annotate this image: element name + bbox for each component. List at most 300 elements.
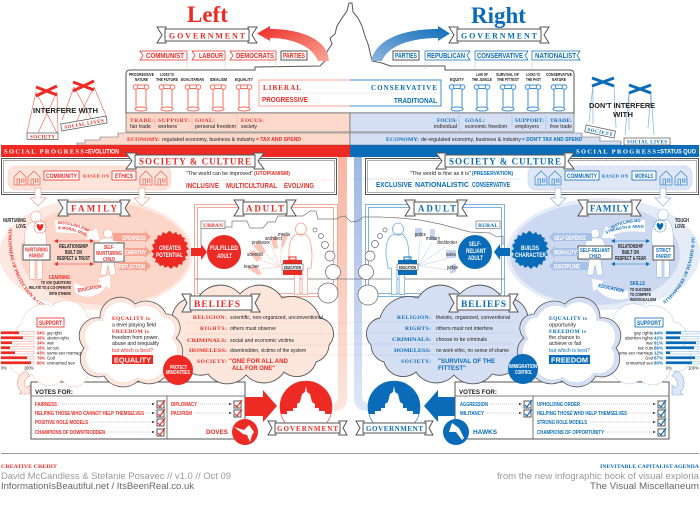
panel: left policy row: FOCUS: xyxy=(241,118,264,124)
columns: left values: LOOKS TO xyxy=(160,72,174,77)
panel: right beliefs cloud: SOCIETY: xyxy=(401,359,431,365)
arrow and circle: self-reliant adult: SELF- xyxy=(469,242,481,248)
columns: right values: LAW OF xyxy=(476,72,488,77)
chart: left support: 34% xyxy=(37,340,46,346)
chart: right support: 80% xyxy=(654,360,664,366)
votes: left panel: PACIFISM xyxy=(171,411,192,417)
panel: right equality cloud: but which is best? xyxy=(549,348,590,354)
skyline and horizon xyxy=(195,211,505,279)
interfere with: scaffolds left: SOCIAL LIVES xyxy=(64,119,105,131)
panel: left economy xyxy=(77,133,350,145)
nurturing parent: NURTURING xyxy=(3,218,26,224)
panel: left beliefs cloud: CRIMINALS: xyxy=(187,338,227,344)
arrow and circle: fulfilled adult: FULFILLED xyxy=(210,245,238,252)
arrow and circle: self-reliant adult xyxy=(458,235,510,269)
votes: left panel: CHAMPIONS OF DOWNTRODDEN xyxy=(35,430,105,436)
votes: right panel: CHAMPIONS OF OPPORTUNITY xyxy=(537,430,604,436)
education arrow left xyxy=(74,275,110,297)
panel: left beliefs cloud: HOMELESS: xyxy=(189,348,227,354)
credit: left xyxy=(1,464,231,491)
chart: right support: 87% xyxy=(654,356,664,362)
votes: right panel: AGGRESSION xyxy=(460,402,488,408)
jobs left: scientist xyxy=(247,252,264,258)
panel: left economy: = TAX AND SPEND xyxy=(256,137,301,143)
strict parent: LOVE xyxy=(675,224,685,230)
social progress: left bar: =EVOLUTION xyxy=(85,148,119,156)
relationship left: RESPECT & TRUST xyxy=(57,256,90,262)
parties: left: COMMUNIST xyxy=(146,53,185,60)
panel: left society and culture: (UTOPIANISM) xyxy=(254,171,290,177)
arrow and circle: fulfilled adult xyxy=(191,235,241,269)
panel: right equality cloud: opportunity xyxy=(549,322,577,328)
panel: right economy: = DON'T TAX AND SPEND xyxy=(522,137,582,143)
votes: right panel xyxy=(455,382,669,439)
relationship left xyxy=(54,239,94,266)
chart: left support: 100% xyxy=(24,366,35,372)
relationship right: BUILT ON xyxy=(622,250,639,256)
chart: left support: abortion rights xyxy=(47,336,69,342)
chart: right support: gay rights xyxy=(634,330,654,336)
panel: left beliefs cloud: SOCIETY: xyxy=(197,359,227,365)
strict parent: TOUGH xyxy=(675,218,689,224)
chart: left support: 66% xyxy=(37,336,46,342)
panel: right beliefs cloud: RELIGION: xyxy=(397,315,431,321)
panel: right beliefs cloud: choose to be criminals xyxy=(436,337,488,343)
relationship right xyxy=(611,239,650,266)
ribbon: society and culture left xyxy=(126,153,264,169)
starburst: creates potential: CREATES xyxy=(159,246,181,252)
votes: right panel: VOTES FOR: xyxy=(459,389,497,396)
chart: right support: 12% xyxy=(654,350,664,356)
ribbon: family right xyxy=(578,200,641,216)
community row right: MORALS xyxy=(635,173,653,180)
instilling arrow right xyxy=(602,219,645,238)
education arrow right xyxy=(592,279,628,300)
ribbon: left government xyxy=(157,27,257,43)
ribbon: society and culture right: SOCIETY & CULTURE xyxy=(449,156,561,166)
votes: left panel: POSITIVE ROLE MODELS xyxy=(35,420,88,426)
social progress: right bar xyxy=(350,145,699,157)
arrow and circle: self-reliant adult: ADULT xyxy=(468,256,483,262)
interfere with: scaffolds left: SOCIETY xyxy=(30,136,55,140)
ribbon: left government bottom: GOVERNMENT xyxy=(277,425,338,433)
panel: right equality cloud: FREEDOM is xyxy=(549,329,586,335)
ribbon: family left: FAMILY xyxy=(71,204,118,214)
arrows: community to family right xyxy=(550,188,671,206)
votes: right panel: HAWKS xyxy=(473,429,498,436)
jobs left xyxy=(244,232,290,275)
community row left xyxy=(8,166,171,190)
circle: protect minorities: MINORITIES xyxy=(166,370,191,376)
panel: right beliefs cloud: others must not interfere xyxy=(436,326,493,332)
columns: right values: SURVIVAL OF xyxy=(496,72,519,77)
strict parent: STRICT xyxy=(656,248,671,254)
panel: left equality cloud: EQUALITY is xyxy=(112,316,150,322)
ribbon: beliefs right xyxy=(449,294,518,312)
panel: left economy: regulated economy, business & industry xyxy=(162,137,256,143)
credit: left: David McCandless & Stefanie Posavec // v1.0 // Oct 09 xyxy=(1,471,231,481)
panel: right equality cloud xyxy=(517,297,621,387)
arrow: votes to right government xyxy=(424,390,455,422)
social progress: left bar: SOCIAL PROGRESS xyxy=(4,148,84,156)
central stripes xyxy=(334,157,368,411)
jobs right: military xyxy=(426,236,440,242)
instilling arrow right: STRENGTH & ABSOLUTES xyxy=(605,225,644,234)
chart: left support: 90% xyxy=(37,360,46,366)
columns: left values xyxy=(129,72,253,111)
votes: right panel: STRONG ROLE MODELS xyxy=(537,420,587,426)
ribbon: adult right: ADULT xyxy=(418,204,456,214)
credit: right xyxy=(497,464,699,491)
ribbon: beliefs left xyxy=(182,294,260,312)
jobs left: professor xyxy=(252,240,270,246)
ribbon: adult left xyxy=(234,200,296,216)
chart: right support: 0% xyxy=(666,366,673,372)
chart: right support: same-sex marriage xyxy=(617,350,653,356)
arrows: community to family left xyxy=(30,188,150,206)
figure: left adult with education case: EDUCATION xyxy=(284,265,301,270)
chart: right support: abortion rights xyxy=(625,336,654,342)
panel: left equality cloud: freedom from power, xyxy=(112,335,159,341)
capitol outline and temple base xyxy=(126,3,574,113)
chart: right support: war xyxy=(646,340,653,346)
chart: left support: SUPPORT xyxy=(39,320,62,327)
panel: right adult xyxy=(366,204,504,296)
panel: right beliefs cloud: "SURVIVAL OF THE xyxy=(438,359,495,365)
votes: left panel xyxy=(31,382,245,439)
panel: right society and culture xyxy=(350,158,698,194)
chart: right support: 91% xyxy=(654,340,664,346)
ribbon: right government bottom: GOVERNMENT xyxy=(366,425,423,433)
panel: left beliefs cloud: downtrodden, victims of the system xyxy=(230,348,306,354)
panel: left beliefs cloud xyxy=(166,285,350,384)
panel: left policy row: personal freedom xyxy=(195,124,236,130)
social progress: left bar xyxy=(1,145,350,157)
columns: left values: EQUALITY xyxy=(235,77,253,82)
parties: left: LABOUR xyxy=(199,53,223,60)
chart: left support: 26% xyxy=(37,346,46,352)
relationship left: RELATIONSHIP xyxy=(59,244,88,250)
interfere with: scaffolds right: DON'T INTERFERE xyxy=(589,101,655,110)
arrow: capitol to right government xyxy=(371,26,450,61)
chart: right support: 44% xyxy=(654,330,664,336)
columns: left values: PROGRESSIVE xyxy=(129,72,154,77)
outcome arrows right: DISCIPLINE xyxy=(554,264,580,270)
social progress: right bar: SOCIAL PROGRESS xyxy=(576,148,656,156)
votes: left panel: FAIRNESS xyxy=(35,402,57,408)
skills text: INDIVIDUALISM xyxy=(630,297,656,303)
learning text xyxy=(29,275,72,297)
panel: left equality cloud: EQUALITY xyxy=(114,358,151,364)
footer divider xyxy=(1,452,699,454)
jobs right: sales xyxy=(446,252,456,258)
circle: immigration control: IMMIGRATION xyxy=(509,364,537,370)
panel: right policy row xyxy=(350,113,574,132)
panel: right beliefs cloud: no work ethic, no sense of shame xyxy=(436,348,509,354)
icon: hawk xyxy=(443,419,469,445)
panel: liberal vs conservative labels: PROGRESSIVE xyxy=(262,97,308,104)
community row right: COMMUNITY xyxy=(567,173,597,180)
panel: left society and culture: INCLUSIVE xyxy=(186,183,219,190)
label: urban: URBAN xyxy=(203,223,223,229)
panel: left beliefs cloud: social and economic victims xyxy=(230,338,295,344)
panel: right beliefs cloud: FITTEST" xyxy=(438,366,466,372)
nurturing parent xyxy=(3,211,50,279)
ribbon: left government bottom xyxy=(268,421,347,435)
learning text: WITH OTHERS xyxy=(49,291,72,297)
columns: right values xyxy=(449,72,572,111)
parties: right: PARTIES xyxy=(395,53,417,60)
jobs right xyxy=(415,228,458,274)
skills text: TO COMPETE xyxy=(630,292,652,298)
columns: right values: THE JUNGLE xyxy=(472,77,492,82)
panel: right equality cloud: achieve or fail xyxy=(549,341,581,347)
outcome arrows right: SELF-DEFENCE xyxy=(554,236,586,242)
panel: right equality cloud: the chance to xyxy=(549,335,580,341)
chart: left support: God xyxy=(47,356,55,362)
outcome arrows left xyxy=(113,231,151,272)
ribbon: beliefs right: BELIEFS xyxy=(461,300,506,310)
panel: left adult xyxy=(194,204,338,296)
columns: left values: EGALITARIAN xyxy=(181,77,204,82)
interfere with: scaffolds right: SOCIETY xyxy=(587,128,613,138)
ribbon: family left xyxy=(58,200,130,216)
panel: right society and culture: NATIONALISTIC xyxy=(415,182,469,189)
panel: liberal vs conservative labels xyxy=(259,80,441,106)
panel: left policy row: SUPPORT: xyxy=(158,118,190,124)
label: urban xyxy=(201,221,225,229)
chart: right support: 100% xyxy=(688,366,700,372)
panel: left equality cloud: abuse and inequality xyxy=(112,341,160,347)
learning text: TO ASK QUESTIONS xyxy=(41,280,71,286)
chart: left support xyxy=(1,301,106,394)
ribbon: beliefs left: BELIEFS xyxy=(194,300,240,310)
relationship left: BUILT ON xyxy=(65,250,82,256)
interfere with: scaffolds right: SOCIAL LIVES xyxy=(627,140,667,146)
learning text: RELATE TO & CO-OPERATE xyxy=(29,285,72,291)
chart: right support xyxy=(600,304,700,395)
interfere with: scaffolds right: WITH xyxy=(613,110,633,119)
ribbon: society and culture right xyxy=(436,153,574,169)
panel: right economy xyxy=(350,133,621,145)
icon: left capitol dome xyxy=(279,381,333,434)
credit: right: from the new infographic book of visual exploria xyxy=(497,471,699,481)
education arrow right: EDUCATION xyxy=(598,283,625,294)
interfere with: scaffolds left xyxy=(27,81,107,140)
panel: left family xyxy=(0,188,193,310)
skills text: SKILLS xyxy=(630,281,645,287)
thought bubbles left xyxy=(313,228,340,303)
nurturing parent: PARENT xyxy=(29,254,44,260)
child right xyxy=(578,229,612,275)
parties: right: CONSERVATIVE xyxy=(477,53,523,60)
ribbon: right government xyxy=(449,27,549,43)
circle: immigration control xyxy=(508,354,538,384)
panel: left policy row: TRADE: xyxy=(130,118,154,124)
panel: left society and culture: "The world can be improved" xyxy=(186,171,253,177)
starburst: creates potential xyxy=(151,231,189,269)
chart: right support: SUPPORT xyxy=(637,320,661,327)
child right: CHILD xyxy=(589,254,601,260)
panel: left society and culture xyxy=(2,158,336,194)
interfere with: scaffolds right xyxy=(585,78,670,146)
panel: liberal vs conservative labels: LIBERAL xyxy=(263,84,301,92)
parties: left: PARTIES xyxy=(283,53,305,60)
child left: CHILD xyxy=(103,257,115,263)
columns: left values: NATURE xyxy=(135,77,148,82)
panel: liberal vs conservative labels: CONSERVATIVE xyxy=(371,84,437,92)
panel: right society and culture: EXCLUSIVE xyxy=(376,182,412,189)
community row left: BASED ON xyxy=(83,174,110,178)
starburst: builds character xyxy=(511,231,549,269)
columns: right values: CONSERVATIVE xyxy=(546,72,572,77)
chart: left support: tax cuts xyxy=(47,346,59,352)
columns: right values: EQUITY xyxy=(450,77,464,82)
panel: left beliefs cloud: "ONE FOR ALL AND xyxy=(229,359,289,365)
learning text: LEARNING xyxy=(49,275,70,281)
panel: right equality cloud: FREEDOM xyxy=(551,358,588,364)
nurturing parent: LOVE xyxy=(16,224,26,230)
relationship right: RELATIONSHIP xyxy=(618,244,643,250)
child left: NURTURING xyxy=(96,251,122,257)
ribbon: adult right xyxy=(405,200,467,216)
panel: left society and culture: EVOLVING xyxy=(284,183,314,190)
parties: right: NATIONALIST xyxy=(535,53,577,60)
panel: right beliefs cloud: HOMELESS: xyxy=(394,348,431,354)
chart: left support: 0% xyxy=(1,366,8,372)
icon: dove xyxy=(232,419,258,445)
panel: right economy: ECONOMY: xyxy=(386,137,419,143)
ribbon: adult left: ADULT xyxy=(246,204,284,214)
nurturing parent: NURTURING xyxy=(25,248,48,254)
parties: left: DEMOCRATS xyxy=(236,53,274,60)
panel: right beliefs cloud: RIGHTS: xyxy=(405,326,431,332)
relationship right: RESPECT & FEAR xyxy=(615,256,646,262)
panel: liberal vs conservative labels: TRADITIONAL xyxy=(394,98,438,105)
strict parent xyxy=(651,209,689,277)
outcome arrows left: OPENNESS xyxy=(122,235,146,242)
columns: right values: THE PAST xyxy=(526,77,541,82)
panel: right policy row: individual xyxy=(434,124,457,130)
ribbon: right government: GOVERNMENT xyxy=(461,32,538,40)
title: Right: Right xyxy=(471,3,526,28)
panel: left beliefs cloud: ALL FOR ONE" xyxy=(232,366,275,372)
panel: left policy row xyxy=(126,113,350,132)
credit: left: InformationIsBeautiful.net / ItsBeenReal.co.uk xyxy=(1,481,195,491)
jobs left: architect xyxy=(265,236,283,242)
education arrow left: EDUCATION xyxy=(77,284,102,294)
chart: left support: gay rights xyxy=(47,330,62,336)
columns: left values: IDEALISM xyxy=(210,77,227,82)
panel: left beliefs cloud: others must observe xyxy=(230,326,276,332)
starburst: builds character: CHARACTER xyxy=(515,253,547,259)
chart: left support: 43% xyxy=(37,350,46,356)
community row right xyxy=(528,166,692,190)
votes: left panel: DIPLOMACY xyxy=(171,402,197,408)
panel: right society and culture: (PRESERVATION) xyxy=(472,171,513,177)
panel: right family xyxy=(506,188,700,310)
child right: SELF-RELIANT xyxy=(580,248,610,254)
outcome arrows left: REFLECTION xyxy=(119,264,145,270)
parties: left xyxy=(140,51,307,69)
figure: right adult with education case: EDUCATION xyxy=(399,265,416,270)
panel: right beliefs cloud: CRIMINALS: xyxy=(392,337,431,343)
chart: left support: 54% xyxy=(37,330,46,336)
community row left: COMMUNITY xyxy=(46,173,78,180)
parties: right xyxy=(393,51,580,69)
panel: left equality cloud xyxy=(79,297,183,387)
columns: right values: NATURE xyxy=(552,77,566,82)
panel: left equality cloud: a level playing field xyxy=(112,322,156,328)
starburst: creates potential: POTENTIAL xyxy=(156,253,183,259)
outcome arrows left: EMPATHY xyxy=(125,250,146,256)
chart: right support: 42% xyxy=(654,336,664,342)
community row right: BASED ON xyxy=(602,174,629,178)
panel: left policy row: society xyxy=(241,124,258,130)
instilling arrow left xyxy=(55,220,100,240)
chart: right support: 86% xyxy=(654,346,664,352)
jobs right: judge xyxy=(446,265,458,271)
panel: left beliefs cloud: RELIGION: xyxy=(193,315,227,321)
instilling arrow right: INSTILLING MORAL xyxy=(610,219,640,229)
panel: right policy row: employers xyxy=(515,124,540,130)
panel: left beliefs cloud: RIGHTS: xyxy=(200,326,227,332)
jobs left: teacher xyxy=(244,264,259,270)
chart: right support: God xyxy=(645,356,653,362)
credit: left: CREATIVE CREDIT xyxy=(1,464,57,470)
outcome arrows right: MORALITY xyxy=(554,250,577,256)
votes: right panel: UPHOLDING ORDER xyxy=(537,402,581,408)
circle: immigration control: CONTROL xyxy=(515,370,532,376)
panel: left policy row: fair trade xyxy=(130,124,151,130)
panel: left beliefs cloud: scientific, non-organized, unconventional xyxy=(230,315,323,321)
arrow and circle: fulfilled adult: ADULT xyxy=(217,253,232,260)
arrow and circle: self-reliant adult: RELIANT xyxy=(466,249,486,255)
panel: right society and culture: CONSERVATIVE xyxy=(472,182,510,189)
chart: left support: unmarried sex xyxy=(47,360,76,366)
panel: right equality cloud: EQUALITY is xyxy=(549,316,587,322)
circle: protect minorities: PROTECT xyxy=(170,365,187,371)
panel: left equality cloud: but which is best? xyxy=(112,348,153,354)
child left xyxy=(94,229,124,275)
panel: right policy row: SUPPORT: xyxy=(515,118,544,124)
panel: right policy row: TRADE: xyxy=(550,118,572,124)
credit: right: The Visual Miscellaneum xyxy=(590,481,699,491)
panel: right policy row: economic freedom xyxy=(465,124,507,130)
panel: right society and culture: "The world is fine as it is" xyxy=(410,171,471,177)
panel: left society and culture: MULTICULTURAL xyxy=(226,183,278,190)
skills text: TO SUCCEED xyxy=(630,287,651,293)
figure: right adult with education case xyxy=(386,223,418,295)
chart: right support: unmarried sex xyxy=(626,360,654,366)
starburst: builds character: BUILDS xyxy=(521,246,539,252)
label: rural xyxy=(476,221,500,229)
chart: left support: war xyxy=(47,340,54,346)
ribbon: society and culture left: SOCIETY & CULTURE xyxy=(139,156,251,166)
ribbon: left government: GOVERNMENT xyxy=(169,32,246,40)
figure: left adult with education case xyxy=(282,223,312,295)
interfere with: scaffolds left: INTERFERE WITH xyxy=(33,106,98,115)
columns: right values: THE FITTEST xyxy=(497,77,519,82)
panel: right economy: de-regulated economy, business & industry xyxy=(421,137,522,143)
chart: left support: same-sex marriage xyxy=(47,350,83,356)
panel: left economy: ECONOMY: xyxy=(127,137,160,143)
arrow: capitol to left government xyxy=(257,26,329,61)
jobs right: stockbroker xyxy=(437,240,457,246)
jobs left: media xyxy=(278,232,290,238)
chart: right support: tax cuts xyxy=(638,346,654,352)
panel: right policy row: GOAL: xyxy=(465,118,485,124)
